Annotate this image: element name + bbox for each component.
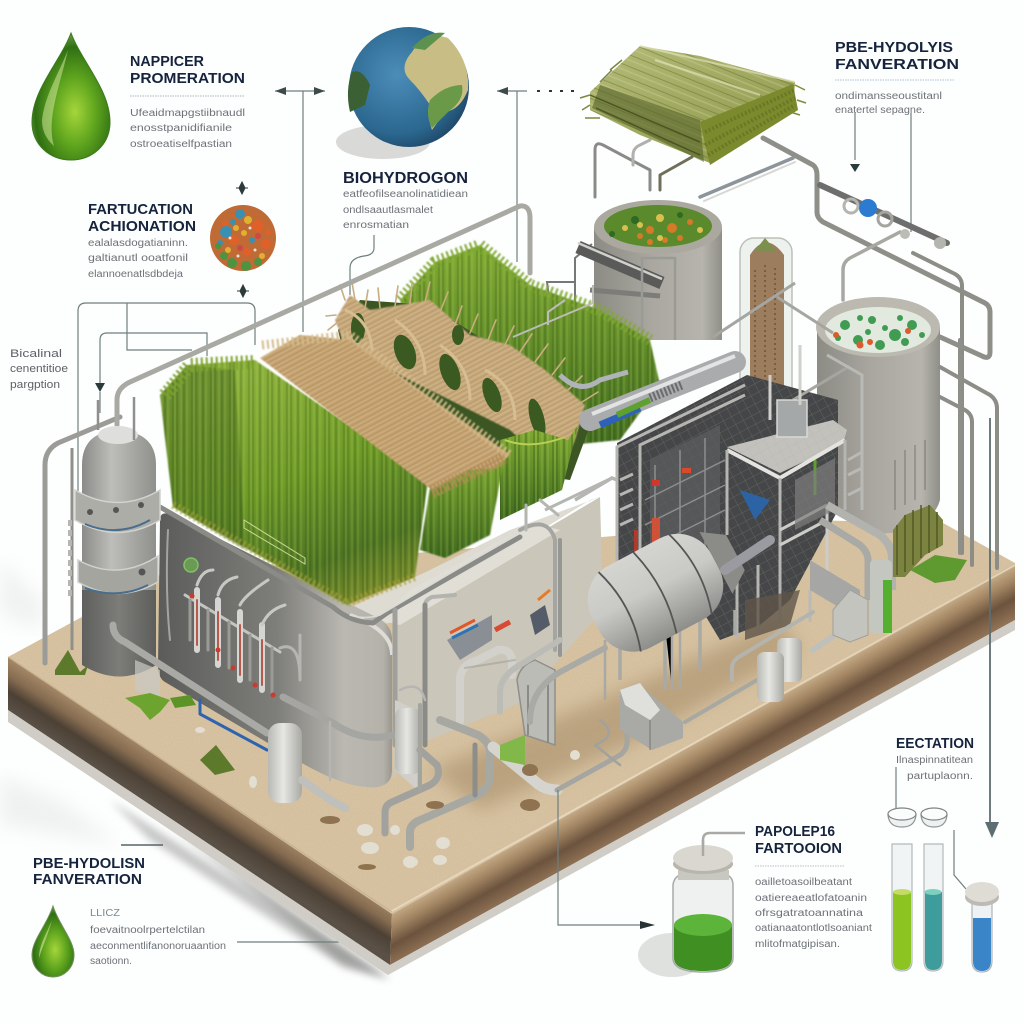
platform: soil block [8, 520, 1015, 975]
leader lines and arrows [78, 87, 966, 942]
right side pipes [395, 500, 560, 745]
label: Biohydrogon: ondlsaautlasmalet [343, 205, 433, 216]
label: Nappicer Promeration: NAPPICER [130, 53, 204, 70]
tank left face [158, 513, 392, 787]
rocks [195, 727, 580, 868]
label: Papolepis Fartooion [755, 823, 872, 950]
small gas cylinders and green tube [757, 560, 892, 702]
label: Biohydrogon: eatfeofilseanolinatidiean [343, 189, 468, 200]
tan straw topped grass block [260, 335, 510, 558]
label: Eectation: partuplaonn. [907, 771, 973, 782]
right side ladder and pipes [810, 355, 892, 622]
front green grass block [160, 360, 428, 605]
label: Fartucation Achionation: ealalasdogatianinn. [88, 238, 188, 249]
background wisps and platform shadow [0, 560, 390, 980]
label: Biofuel [10, 348, 68, 391]
red and blue instruments [634, 460, 815, 558]
label: Pre-hydrolysis top right [835, 39, 959, 116]
icon: test tubes [892, 844, 999, 972]
label: Papolepis Fartooion: PAPOLEP16 [755, 823, 835, 840]
colourful control panel [447, 590, 550, 660]
reactor vessel with bands [45, 206, 530, 676]
white cylinder and gas bottle [268, 687, 425, 808]
tank top surface [345, 497, 600, 625]
platform top surface [8, 520, 1015, 914]
label: Nappicer Promeration [130, 53, 245, 150]
label: Pre-hydrolysis top right: enatertel sepagne. [835, 105, 925, 116]
label: Pre-hydrolysis bottom left [33, 855, 226, 967]
label: Eectation: EECTATION [896, 735, 974, 752]
label: Pre-hydrolysis bottom left: saotionn. [90, 956, 132, 967]
tank right face [393, 497, 603, 780]
right concrete tank with pellets [816, 297, 940, 533]
frame struts and ladder [513, 283, 850, 565]
label: Fartucation Achionation: galtianutl ooatfonil [88, 253, 188, 264]
label: Pre-hydrolysis top right: ondimansseoustitanl [835, 91, 942, 102]
label: Pre-hydrolysis bottom left: foevaitnoolrpertelctilan [90, 925, 205, 936]
central machinery frame [513, 283, 892, 640]
icon: small green droplet [32, 906, 74, 977]
canopy box [727, 345, 847, 637]
label: Nappicer Promeration: PROMERATION [130, 70, 245, 87]
green leaves and tufts [55, 505, 967, 775]
valve manifold on tank [113, 530, 400, 780]
icon: colourful biomass sphere [210, 205, 276, 271]
label: Papolepis Fartooion: mlitofmatgipisan. [755, 939, 840, 950]
base strip [8, 620, 1015, 975]
grey concrete digester tank [158, 497, 603, 787]
label: Pre-hydrolysis top right: PBE-HYDOLYIS [835, 39, 953, 56]
blue test tube [965, 882, 999, 972]
label: Fartucation Achionation: ACHIONATION [88, 218, 196, 235]
glass column with brown biomass [740, 238, 792, 413]
middle concrete tank with biomass [547, 200, 722, 340]
label: Fartucation Achionation: FARTUCATION [88, 201, 193, 218]
label: Papolepis Fartooion: oatianaatontlotlsoaniant [755, 923, 872, 934]
label: Nappicer Promeration: enosstpanidifianile [130, 123, 233, 134]
label: Eectation [896, 735, 974, 782]
label: Eectation: Ilnaspinnatitean [896, 755, 973, 766]
label: Biohydrogon [343, 170, 468, 231]
lime test tube [892, 844, 912, 971]
ground pipes [195, 612, 835, 870]
label: Fartucation Achionation [88, 201, 196, 280]
icon: large green droplet [32, 33, 110, 160]
label: Nappicer Promeration: ostroeatiselfpastian [130, 139, 232, 150]
label: Biofuel: Bicalinal [10, 348, 62, 360]
label: Papolepis Fartooion: FARTOOION [755, 840, 842, 857]
label: Biohydrogon: BIOHYDROGON [343, 170, 468, 187]
grass bundle sheaf [580, 46, 806, 165]
main flow line to jar [558, 418, 999, 929]
back green grass block [400, 245, 660, 450]
tank rim pipe [160, 507, 520, 623]
label: Pre-hydrolysis bottom left: PBE-HYDOLISN [33, 855, 145, 872]
label: Pre-hydrolysis bottom left: FANVERATION [33, 871, 142, 888]
icon: glass jar with green liquid [638, 840, 733, 977]
tan feathery plumes grass [326, 282, 598, 480]
label: Papolepis Fartooion: oailletoasoilbeatant [755, 877, 852, 888]
large horizontal silver drum tank [500, 510, 770, 722]
label: Papolepis Fartooion: oatiereaeatlofatoanin [755, 893, 867, 904]
icon: petri dishes [888, 808, 947, 827]
top pipe network with blue valve [595, 138, 997, 568]
teal test tube [924, 844, 943, 971]
label: Biohydrogon: enrosmatian [343, 220, 409, 231]
right soil face [390, 563, 1015, 965]
icon: blue valve [844, 199, 946, 249]
glass tank and grey box units [500, 660, 683, 765]
label: Biofuel: cenentitioe [10, 363, 68, 375]
label: Nappicer Promeration: Ufeaidmapgstiibnaudl [130, 108, 245, 119]
label: Pre-hydrolysis bottom left: LLICZ [90, 908, 120, 919]
green grass under plumes [500, 425, 578, 520]
label: Pre-hydrolysis top right: FANVERATION [835, 56, 959, 73]
label: Biofuel: pargption [10, 379, 60, 391]
sand shadows [430, 620, 800, 810]
label: Pre-hydrolysis bottom left: aeconmentlifanonoruaantion [90, 941, 226, 952]
left soil face [8, 657, 392, 965]
metal stairway and conveyor [547, 243, 675, 340]
label: Fartucation Achionation: elannoenatlsdbdeja [88, 269, 183, 280]
upper silver drum [560, 356, 735, 425]
icon: globe [336, 27, 469, 159]
label: Papolepis Fartooion: ofrsgatratoannatina [755, 908, 864, 919]
